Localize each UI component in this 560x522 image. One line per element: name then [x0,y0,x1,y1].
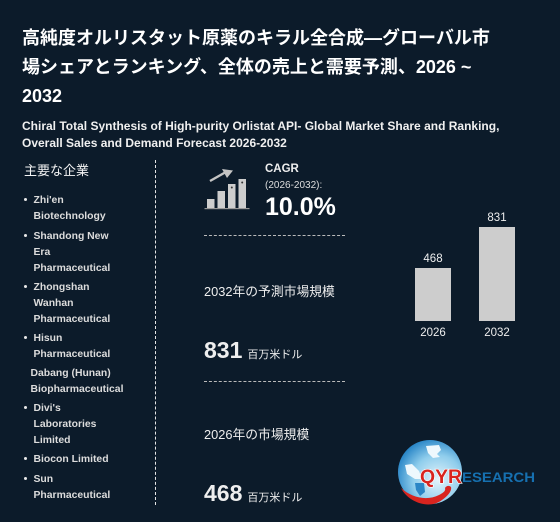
company list: Shandong New [34,231,109,242]
company list [24,195,123,501]
company list: Wanhan [34,298,74,309]
company list: Biocon Limited [34,454,109,465]
title: 2032 [22,86,62,106]
company list: Sun [34,474,53,485]
stat: 2032 forecast market size: 2032年の予測市場規模 [204,284,335,299]
title: 場シェアとランキング、全体の売上と需要予測、2026 ~ [22,57,471,77]
bar: 2032: 831 [487,212,507,224]
logo: QYResearch: ESEARCH [462,469,535,485]
logo: QYResearch [398,440,535,504]
CAGR callout: CAGR [265,163,299,175]
subtitle: Chiral Total Synthesis of High-purity Orlistat API- Global Market Share and Ranking, [22,119,499,133]
bar: 2032: 2032 [484,327,510,339]
company list: Zhongshan [34,282,90,293]
company list: Dabang (Hunan) [30,368,111,379]
company list: Era [34,247,50,258]
company list: Limited [34,435,70,446]
stat: 2026 market size: 2026年の市場規模 [204,427,309,442]
stat: 2032 forecast market size [204,284,335,363]
stat: 2032 forecast market size: 831 百万米ドル [204,337,302,363]
subtitle [22,119,499,150]
bar chart [415,212,515,339]
company list: Pharmaceutical [34,490,110,501]
stat: 2026 market size: 468 百万米ドル [204,480,302,506]
heading: key companies: 主要な企業 [24,163,89,178]
company list: Hisun [34,333,62,344]
company list: Pharmaceutical [34,314,110,325]
icon: growth chart [204,169,250,210]
bar: 2026: 2026 [420,327,446,339]
logo: QYResearch: QYR [420,467,462,488]
stat: 2026 market size [204,427,309,506]
CAGR callout: (2026-2032): [265,180,322,191]
company list: Pharmaceutical [34,263,110,274]
bar: 2026 [415,253,451,339]
subtitle: Overall Sales and Demand Forecast 2026-2032 [22,136,287,150]
company list: Laboratories [34,419,96,430]
company list: Biopharmaceutical [30,384,123,395]
CAGR callout [265,163,336,221]
title: 高純度オルリスタット原薬のキラル全合成—グローバル市 [22,28,490,48]
bar: 2032 [479,212,515,339]
company list: Pharmaceutical [34,349,110,360]
title [22,28,490,106]
panel: key companies [24,163,123,501]
company list: Biotechnology [34,211,106,222]
bar: 2026: 468 [423,253,443,265]
company list: Divi's [34,403,61,414]
CAGR callout: 10.0% [265,193,336,221]
company list: Zhi'en [34,195,64,206]
